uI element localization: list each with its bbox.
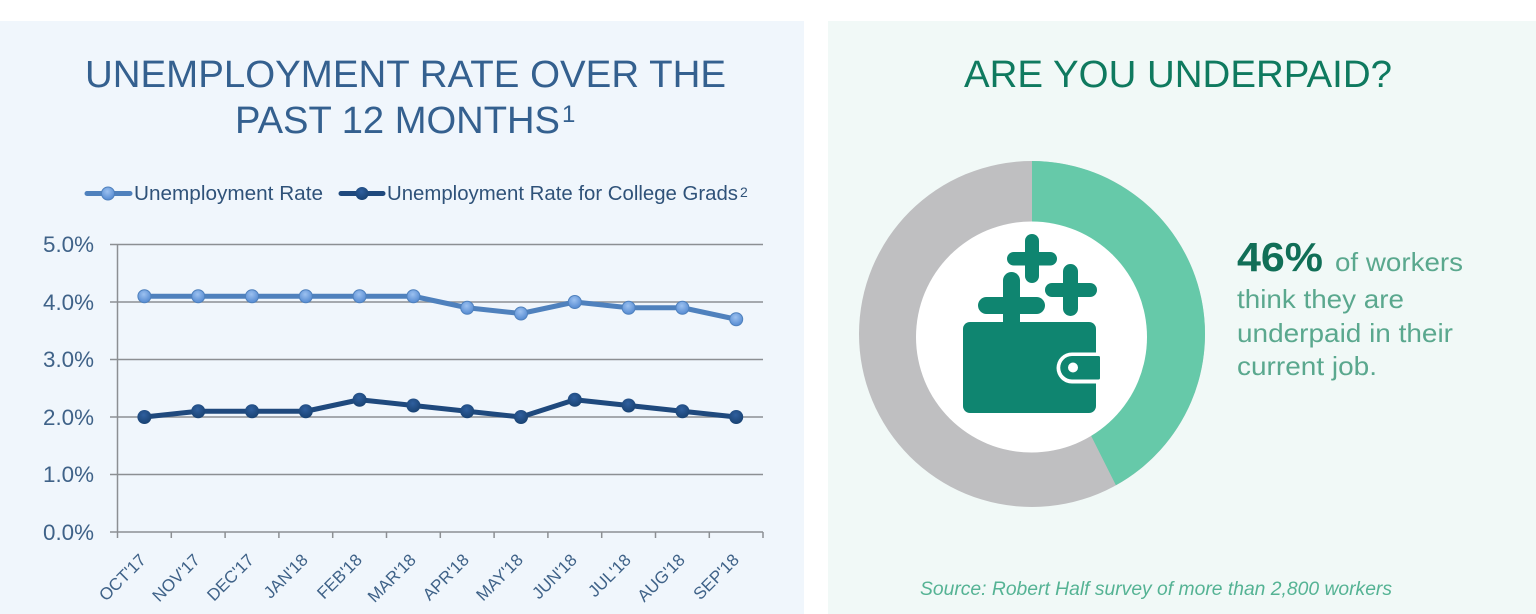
x axis labels: MAY'18 (473, 550, 527, 605)
y axis labels: 5.0% (43, 232, 94, 257)
y axis labels: 2.0% (43, 405, 94, 430)
callout: 46 percent: underpaid in their (1237, 318, 1453, 348)
y axis labels (43, 232, 94, 545)
y axis labels: 0.0% (43, 520, 94, 545)
x axis labels: APR'18 (419, 550, 473, 604)
panel: unemployment rate (0, 21, 804, 614)
x axis labels: SEP'18 (690, 550, 743, 604)
y axis labels: 1.0% (43, 462, 94, 487)
chart legend (87, 183, 748, 205)
callout: 46 percent: 46% (1237, 234, 1323, 280)
source note: Source: Robert Half survey of more than 2,800 workers (920, 579, 1393, 600)
heading: unemployment title: PAST 12 MONTHS (235, 100, 560, 142)
chart legend: 2 (740, 184, 748, 200)
heading: underpaid title: ARE YOU UNDERPAID? (964, 54, 1392, 96)
x axis labels: MAR'18 (364, 550, 420, 606)
icon: wallet with plus signs (963, 234, 1100, 413)
heading: unemployment title: 1 (562, 101, 575, 128)
series: unemployment rate (138, 290, 743, 326)
y axis labels: 4.0% (43, 290, 94, 315)
x axis labels: FEB'18 (313, 550, 366, 603)
x axis labels: NOV'17 (149, 550, 204, 606)
callout: 46 percent (1237, 234, 1463, 381)
callout: 46 percent: current job. (1237, 351, 1377, 381)
x axis labels: DEC'17 (203, 550, 258, 605)
callout: 46 percent: think they are (1237, 284, 1404, 314)
heading: unemployment title: UNEMPLOYMENT RATE OVER THE (85, 54, 726, 96)
x axis labels: JUL'18 (584, 550, 635, 601)
line chart (43, 232, 763, 606)
x axis labels (95, 550, 743, 606)
chart legend: Unemployment Rate (134, 183, 323, 205)
x axis labels: AUG'18 (634, 550, 689, 606)
callout: 46 percent: of workers (1335, 247, 1463, 277)
series: college grads (137, 393, 743, 424)
x axis labels: JUN'18 (528, 550, 581, 603)
x axis labels: JAN'18 (260, 550, 312, 602)
donut chart (859, 161, 1205, 507)
heading: unemployment title (85, 54, 726, 142)
chart grid and axes (110, 244, 763, 538)
y axis labels: 3.0% (43, 347, 94, 372)
chart legend: Unemployment Rate for College Grads (387, 183, 738, 205)
x axis labels: OCT'17 (95, 550, 150, 605)
panel: are you underpaid (828, 21, 1536, 614)
